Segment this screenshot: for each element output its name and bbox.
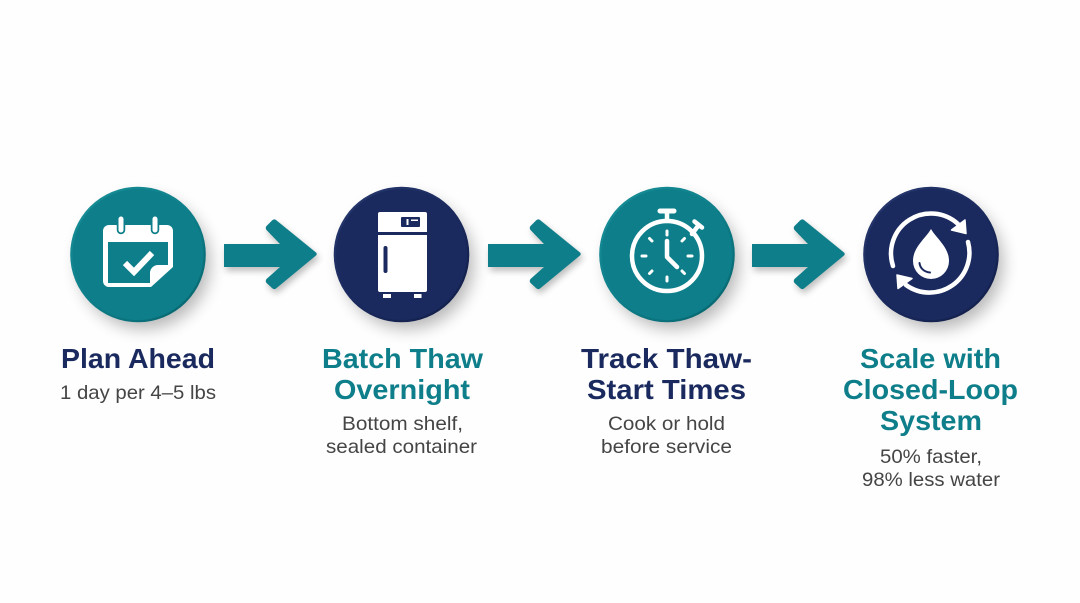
heading: Scale with Closed-Loop System: Scale with	[860, 343, 1001, 374]
text: bottom shelf, sealed container	[326, 413, 478, 458]
heading: Scale with Closed-Loop System	[843, 343, 1018, 436]
heading: Batch Thaw Overnight: Overnight	[334, 374, 470, 405]
step 3: track thaw-start times	[581, 187, 752, 458]
icon: teal circle with calendar	[70, 187, 210, 329]
text: 50% faster, 98% less water: 50% faster,	[880, 446, 982, 468]
heading: Track Thaw-Start Times	[581, 343, 752, 405]
heading: Batch Thaw Overnight	[322, 343, 484, 405]
step 2: batch thaw overnight	[322, 187, 484, 458]
heading: Track Thaw-Start Times: Start Times	[587, 374, 746, 405]
text: cook or hold before service: before service	[601, 436, 732, 458]
text: 1 day per 4–5 lbs: 1 day per 4–5 lbs	[60, 382, 216, 404]
heading: Batch Thaw Overnight: Batch Thaw	[322, 343, 484, 374]
icon: navy circle with refrigerator	[334, 187, 474, 329]
icon: navy circle with water drop and loop arrows	[863, 187, 1003, 329]
icon: teal circle with stopwatch	[599, 187, 739, 329]
text: 50% faster, 98% less water: 98% less water	[862, 469, 1001, 491]
heading: Track Thaw-Start Times: Track Thaw-	[581, 343, 752, 374]
step 1: plan ahead	[60, 187, 216, 404]
text: cook or hold before service: Cook or hold	[608, 413, 725, 435]
arrow 2	[488, 219, 583, 293]
heading: Scale with Closed-Loop System: System	[880, 405, 982, 436]
step 4: scale with closed-loop system	[843, 187, 1018, 491]
text: bottom shelf, sealed container: sealed container	[326, 436, 478, 458]
arrow 1	[224, 219, 319, 293]
heading: Scale with Closed-Loop System: Closed-Loop	[843, 374, 1018, 405]
arrow 3	[752, 219, 847, 293]
text: 50% faster, 98% less water	[862, 446, 1001, 491]
text: bottom shelf, sealed container: Bottom shelf,	[342, 413, 463, 435]
text: cook or hold before service	[601, 413, 732, 458]
heading: Plan Ahead: Plan Ahead	[61, 343, 215, 374]
